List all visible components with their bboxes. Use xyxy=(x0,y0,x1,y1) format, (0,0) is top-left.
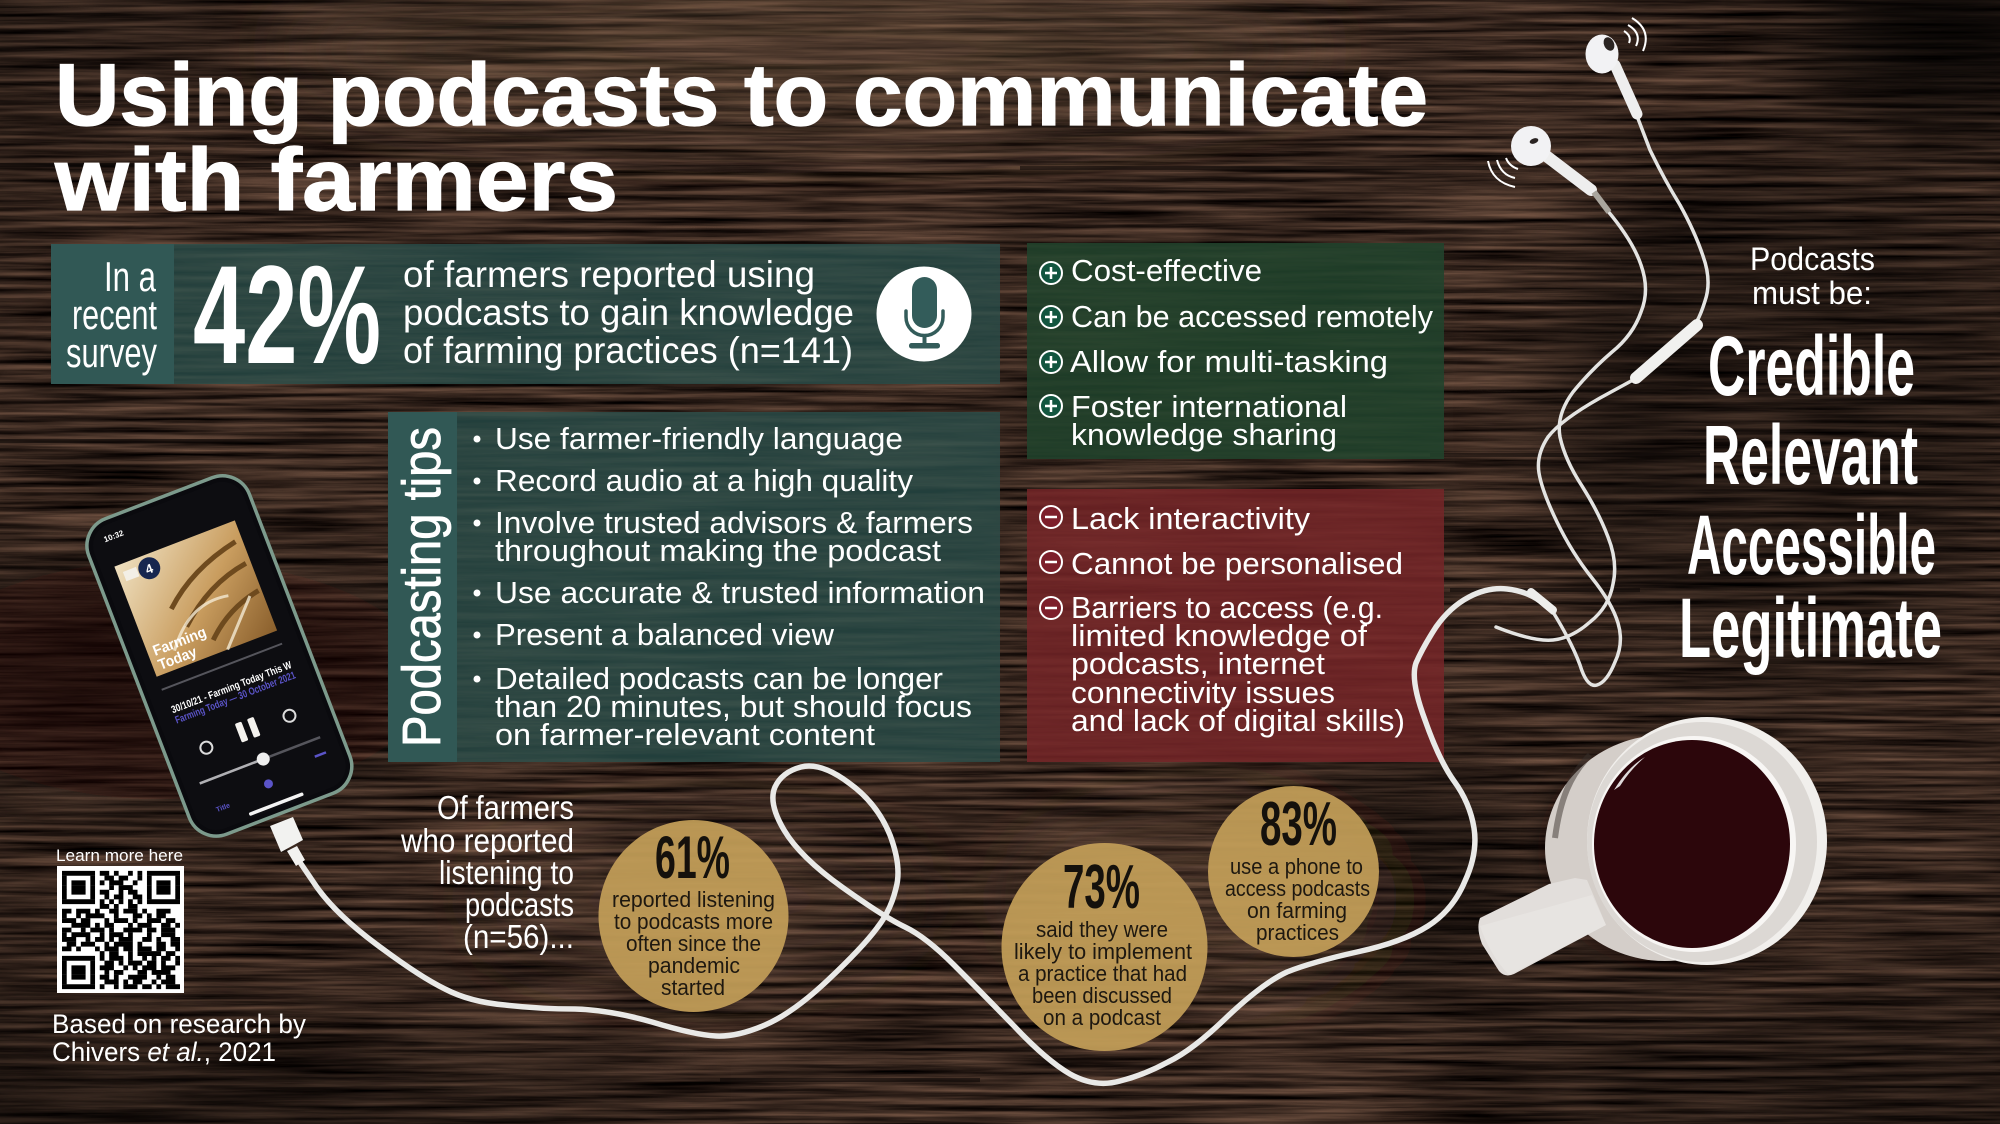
list: tips: than 20 minutes, but should focus xyxy=(495,689,972,724)
icon: microphone xyxy=(876,266,972,362)
illustration: earphone cable xyxy=(295,116,1708,1083)
text: of farmers who reported listening: listening to xyxy=(439,854,574,891)
home indicator xyxy=(249,792,304,816)
list: tips: Present a balanced view xyxy=(495,617,835,652)
list: drawbacks: Lack interactivity xyxy=(1071,501,1311,536)
image: podcast artwork: Today xyxy=(156,643,200,674)
image: podcast artwork xyxy=(114,520,277,677)
list: drawbacks: podcasts, internet xyxy=(1071,646,1325,681)
list: drawbacks: and lack of digital skills) xyxy=(1071,703,1405,738)
text: source credit xyxy=(52,1009,306,1067)
stat bubble: 73%: on a podcast xyxy=(1043,1005,1161,1030)
text: podcasts must be: Podcasts xyxy=(1750,241,1875,277)
stat: 42%: 42% xyxy=(193,236,381,393)
list: tips: throughout making the podcast xyxy=(495,533,941,568)
text: source credit: Based on research by xyxy=(52,1009,306,1039)
text: of farmers who reported listening: Of farmers xyxy=(437,789,574,826)
panel: survey headline stat xyxy=(51,236,1000,393)
text: stat description: podcasts to gain knowledge xyxy=(403,292,854,333)
illustration: left earbud with sound waves xyxy=(1488,126,1609,212)
stat bubble: 61%: to podcasts more xyxy=(614,909,773,934)
image: podcast artwork: Farming xyxy=(150,624,209,660)
text: of farmers who reported listening: who reported xyxy=(400,822,574,859)
illustration: smartphone playing Farming Today xyxy=(79,467,360,845)
title xyxy=(54,45,1428,229)
text: podcasts must be: must be: xyxy=(1752,275,1872,311)
stat bubble: 61%: started xyxy=(661,975,725,1000)
text: episode title: 30/10/21 - Farming Today This W xyxy=(170,659,294,716)
title: Using podcasts to communicate xyxy=(55,45,1428,144)
list: tips: Detailed podcasts can be longer xyxy=(495,661,943,696)
stat bubble: 83%: on farming xyxy=(1247,898,1347,923)
image: podcast artwork: 4 xyxy=(143,560,156,577)
progress bar xyxy=(162,644,282,690)
heading: podcasting tips: Podcasting tips xyxy=(392,427,452,747)
stat bubble: 61%: 61% xyxy=(655,824,730,891)
list: tips: Use accurate & trusted information xyxy=(495,575,985,610)
stat bubble: 61% xyxy=(598,820,788,1012)
icon: plus markers xyxy=(1040,262,1062,417)
stat bubble: 61%: often since the xyxy=(626,931,761,956)
stat bubble: 83%: practices xyxy=(1256,920,1339,945)
stat bubble: 73%: a practice that had xyxy=(1018,961,1187,986)
illustration: coffee cup xyxy=(1478,717,1827,975)
list: benefits: Foster international xyxy=(1071,389,1347,424)
icon: bottom controls xyxy=(211,751,333,814)
list: benefits: Cost-effective xyxy=(1071,253,1262,288)
title: with farmers xyxy=(54,130,618,229)
stat bubble: 83%: 83% xyxy=(1260,790,1337,859)
stat bubble: 83%: use a phone to xyxy=(1230,854,1363,879)
text: source credit: Chivers et al., 2021 xyxy=(52,1037,276,1067)
text: of farmers who reported listening: podcasts xyxy=(465,886,574,923)
icon: minus markers xyxy=(1040,506,1062,619)
text: stat description: of farmers reported using xyxy=(403,254,815,295)
text: learn more here: Learn more here xyxy=(56,846,183,865)
text: in a recent survey: survey xyxy=(66,329,157,376)
list: drawbacks: Cannot be personalised xyxy=(1071,546,1403,581)
panel: podcasting tips xyxy=(388,412,1000,762)
list: drawbacks xyxy=(1071,501,1405,738)
stat bubble: 83%: access podcasts xyxy=(1225,876,1370,901)
stat bubble: 61%: pandemic xyxy=(648,953,740,978)
list: tips: on farmer-relevant content xyxy=(495,717,875,752)
QR code xyxy=(57,866,184,993)
list: drawbacks: Barriers to access (e.g. xyxy=(1071,590,1383,625)
list: benefits xyxy=(1070,253,1433,452)
text: in a recent survey: In a xyxy=(104,253,156,300)
text: in a recent survey xyxy=(66,253,157,376)
panel: benefits xyxy=(1027,243,1444,459)
stat bubble: 73%: likely to implement xyxy=(1014,939,1192,964)
text: in a recent survey: recent xyxy=(72,291,157,338)
stat bubble: 61%: reported listening xyxy=(612,887,775,912)
text: clock: 10:32 xyxy=(103,528,125,544)
panel: drawbacks xyxy=(1027,489,1444,762)
icon: lightning connector xyxy=(270,817,305,866)
list: tips: Record audio at a high quality xyxy=(495,463,913,498)
icon: playback controls xyxy=(196,702,298,757)
list: drawbacks: limited knowledge of xyxy=(1071,618,1367,653)
text: of farmers who reported listening: (n=56)... xyxy=(463,918,574,955)
illustration: right earbud with sound waves xyxy=(1586,18,1646,114)
stat bubble: 83% xyxy=(1208,786,1379,957)
list: tips: Use farmer-friendly language xyxy=(495,421,903,456)
stat bubble: 73% xyxy=(1002,843,1208,1051)
list: drawbacks: connectivity issues xyxy=(1071,675,1335,710)
text: of farmers who reported listening xyxy=(400,789,574,955)
illustration: in-line remote xyxy=(1636,325,1697,378)
volume slider xyxy=(197,731,323,789)
list: tips: Involve trusted advisors & farmers xyxy=(495,505,973,540)
icon: bottom controls: Title xyxy=(215,802,231,814)
text: stat description xyxy=(403,254,854,371)
text: podcasts must be xyxy=(1750,241,1875,311)
stat bubble: 73%: been discussed xyxy=(1032,983,1172,1008)
icon: splitter xyxy=(1531,592,1553,610)
stat bubble: 73%: 73% xyxy=(1063,853,1140,922)
list: tips xyxy=(474,421,985,752)
text: episode subtitle: Farming Today — 30 October 2021 xyxy=(174,669,297,726)
list: benefits: knowledge sharing xyxy=(1071,417,1337,452)
text: credible relevant accessible legitimate xyxy=(1679,319,1942,675)
list: benefits: Can be accessed remotely xyxy=(1071,299,1433,334)
stat bubble: 73%: said they were xyxy=(1036,917,1168,942)
text: stat description: of farming practices (n=141) xyxy=(403,330,853,371)
list: benefits: Allow for multi-tasking xyxy=(1070,344,1388,379)
